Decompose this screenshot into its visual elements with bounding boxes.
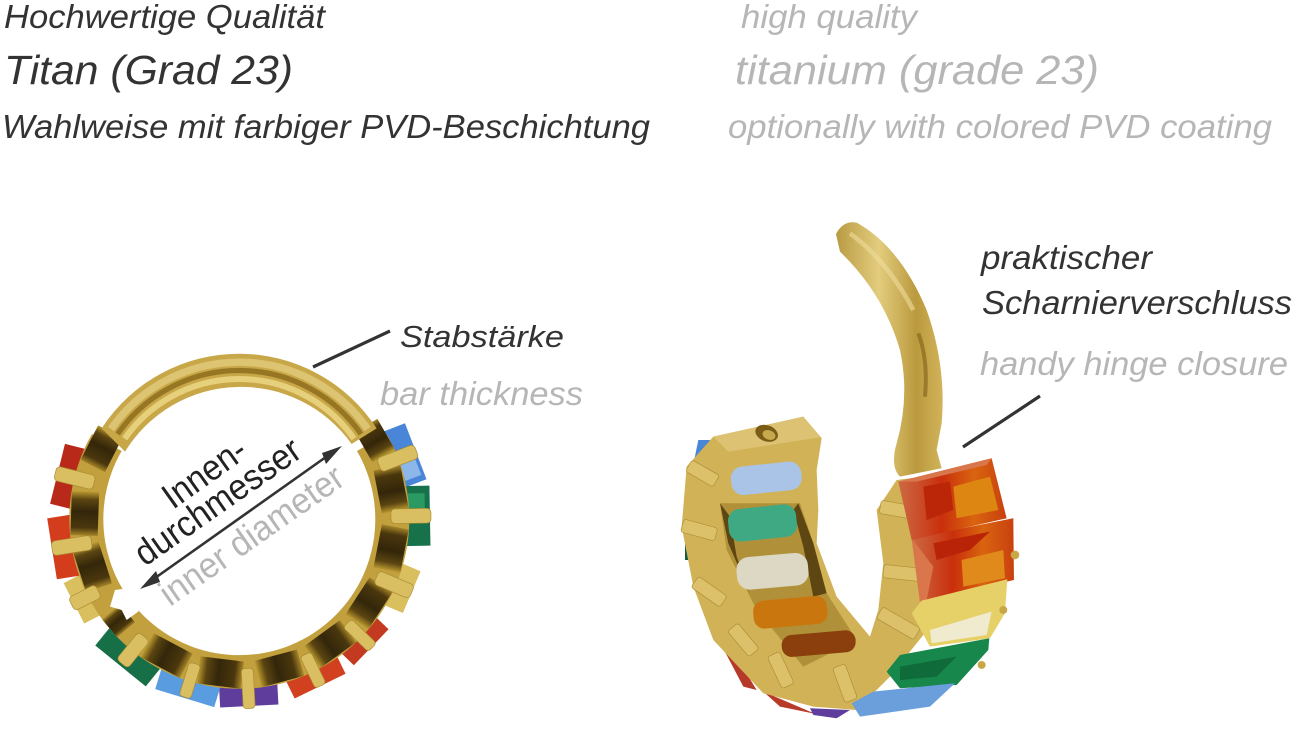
label: durchmesser: durchmesser xyxy=(126,429,309,574)
gem: yellow xyxy=(912,579,1007,647)
setting cells xyxy=(70,419,409,689)
mounting hole xyxy=(753,422,780,445)
label: Scharnierverschluss: Scharnierverschluss xyxy=(982,284,1292,321)
lower setting xyxy=(69,434,409,689)
label: Innen-: Innen- xyxy=(154,429,254,517)
label: praktischer: praktischer xyxy=(980,239,1154,276)
gem: blue xyxy=(852,683,955,717)
body prongs xyxy=(681,460,927,703)
gem: orange lower xyxy=(912,518,1014,602)
label: bar thickness: bar thickness xyxy=(380,375,583,412)
text: coating English: optionally with colored PVD coating xyxy=(728,108,1273,145)
prongs xyxy=(51,444,431,709)
heading: material German: Titan (Grad 23) xyxy=(4,47,293,93)
illustration: ring open side view xyxy=(681,222,1019,718)
gem stones xyxy=(47,423,430,708)
outer gems left edge xyxy=(685,440,850,718)
label: handy hinge closure: handy hinge closure xyxy=(980,345,1288,382)
text: coating German: Wahlweise mit farbiger PVD-Beschichtung xyxy=(2,108,651,145)
illustration: ring front view xyxy=(47,354,431,709)
arrow: inner diameter xyxy=(140,446,342,589)
gold body xyxy=(682,417,930,710)
hinge band xyxy=(836,222,943,477)
heading: material English: titanium (grade 23) xyxy=(735,47,1099,93)
label: inner diameter: inner diameter xyxy=(151,456,352,614)
inner recess xyxy=(720,503,857,667)
gem: orange top xyxy=(898,458,1007,540)
label: Stabstärke: Stabstärke xyxy=(400,319,564,354)
callout line: bar thickness xyxy=(313,331,390,367)
gem pins xyxy=(978,551,1019,669)
gem: green xyxy=(887,638,989,688)
hinge band xyxy=(102,354,377,452)
callout line: hinge closure xyxy=(963,396,1040,447)
white gap xyxy=(110,587,140,620)
inner gem windows xyxy=(727,460,856,658)
